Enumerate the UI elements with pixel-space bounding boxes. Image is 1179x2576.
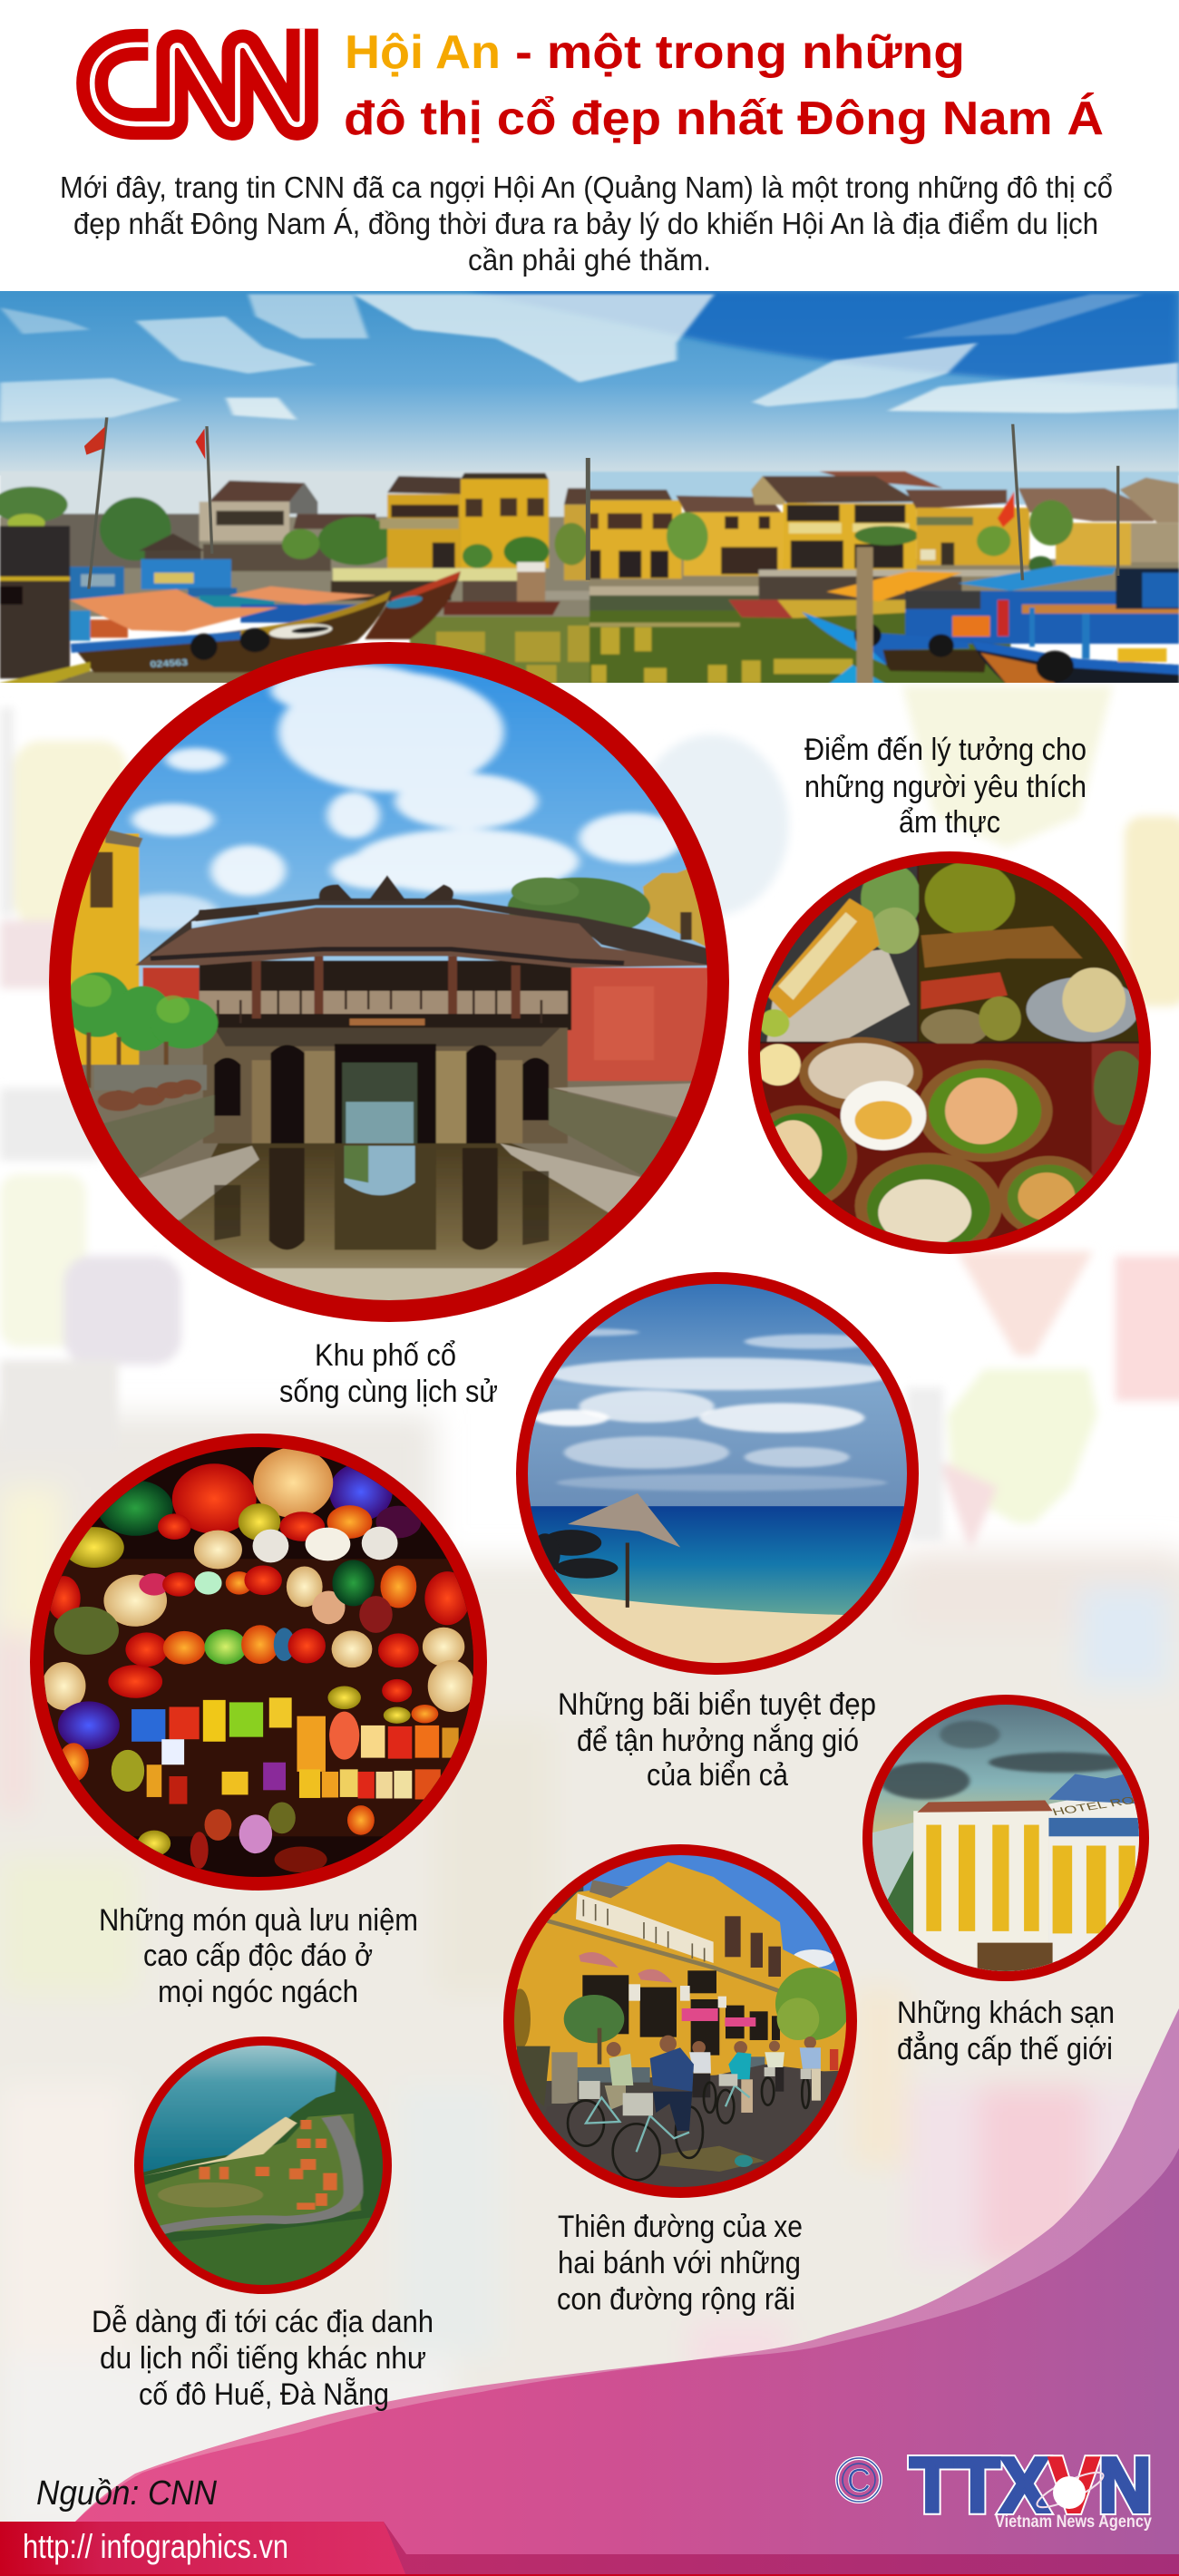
CNN logo <box>93 29 302 124</box>
photo: lanterns <box>23 1429 489 1891</box>
photo: beach <box>512 1268 932 1684</box>
caption: cuisine: những người yêu thích <box>804 770 1086 804</box>
caption: two wheels: hai bánh với những <box>558 2246 801 2280</box>
washed-out lantern background <box>0 683 1179 2576</box>
caption: beaches: để tận hưởng nắng gió <box>577 1724 859 1758</box>
photo: cyclists on yellow street <box>503 1841 871 2203</box>
caption: hotels: đẳng cấp thế giới <box>897 2032 1113 2066</box>
TTXVN logo: Vietnam News Agency <box>995 2513 1152 2532</box>
copyright mark: C <box>847 2462 871 2499</box>
caption: hotels <box>897 1996 1115 2066</box>
caption: nearby destinations: Dễ dàng đi tới các địa danh <box>92 2305 434 2339</box>
copyright mark <box>837 2458 881 2502</box>
footer swoosh <box>0 2008 1179 2576</box>
caption: old town: Khu phố cổ <box>315 1338 456 1373</box>
caption: nearby destinations: cố đô Huế, Đà Nẵng <box>139 2377 389 2412</box>
website url: http:// infographics.vn <box>23 2528 288 2565</box>
intro text <box>60 170 1113 277</box>
caption: beaches: của biển cả <box>647 1758 788 1793</box>
caption: old town: sống cùng lịch sử <box>279 1375 498 1409</box>
TTXVN logo: TTXVN <box>910 2443 1152 2529</box>
photo: Japanese covered bridge <box>45 642 729 1324</box>
caption: beaches: Những bãi biển tuyệt đẹp <box>558 1687 876 1722</box>
caption: two wheels: Thiên đường của xe <box>558 2210 803 2244</box>
caption: cuisine: ẩm thực <box>899 805 1000 840</box>
photo: aerial coast <box>128 2032 398 2294</box>
intro text: đẹp nhất Đông Nam Á, đồng thời đưa ra bảy lý do khiến Hội An là địa điểm du lịch <box>73 207 1098 240</box>
photo: street food collage <box>745 851 1151 1261</box>
caption: nearby destinations: du lịch nổi tiếng khác như <box>100 2341 426 2376</box>
title: Hội An <box>345 26 501 79</box>
hero photo: Hoi An riverside <box>0 291 1179 685</box>
caption: cuisine <box>804 733 1086 840</box>
caption: two wheels: con đường rộng rãi <box>557 2282 795 2317</box>
source: Nguồn: CNN <box>36 2474 218 2513</box>
intro text: Mới đây, trang tin CNN đã ca ngợi Hội An (Quảng Nam) là một trong những đô thị cổ <box>60 170 1113 204</box>
caption: old town <box>279 1338 498 1409</box>
caption: souvenirs: mọi ngóc ngách <box>158 1975 358 2009</box>
photo: luxury hotel: HOTEL ROYAL <box>1050 1790 1165 1818</box>
photo: luxury hotel <box>857 1695 1165 1984</box>
intro text: cần phải ghé thăm. <box>468 243 711 277</box>
caption: nearby destinations <box>92 2305 434 2412</box>
caption: souvenirs: Những món quà lưu niệm <box>99 1903 418 1938</box>
title: - một trong những <box>515 26 965 79</box>
caption: beaches <box>558 1687 876 1793</box>
caption: hotels: Những khách sạn <box>897 1996 1115 2030</box>
title <box>344 26 1104 145</box>
hero photo: Hoi An riverside: 024563 <box>150 658 188 670</box>
caption: souvenirs: cao cấp độc đáo ở <box>143 1939 373 1973</box>
TTXVN logo: TTXVN <box>910 2443 1152 2529</box>
caption: two wheels <box>557 2210 803 2317</box>
caption: cuisine: Điểm đến lý tưởng cho <box>804 733 1086 767</box>
caption: souvenirs <box>99 1903 418 2009</box>
title: đô thị cổ đẹp nhất Đông Nam Á <box>344 92 1104 145</box>
